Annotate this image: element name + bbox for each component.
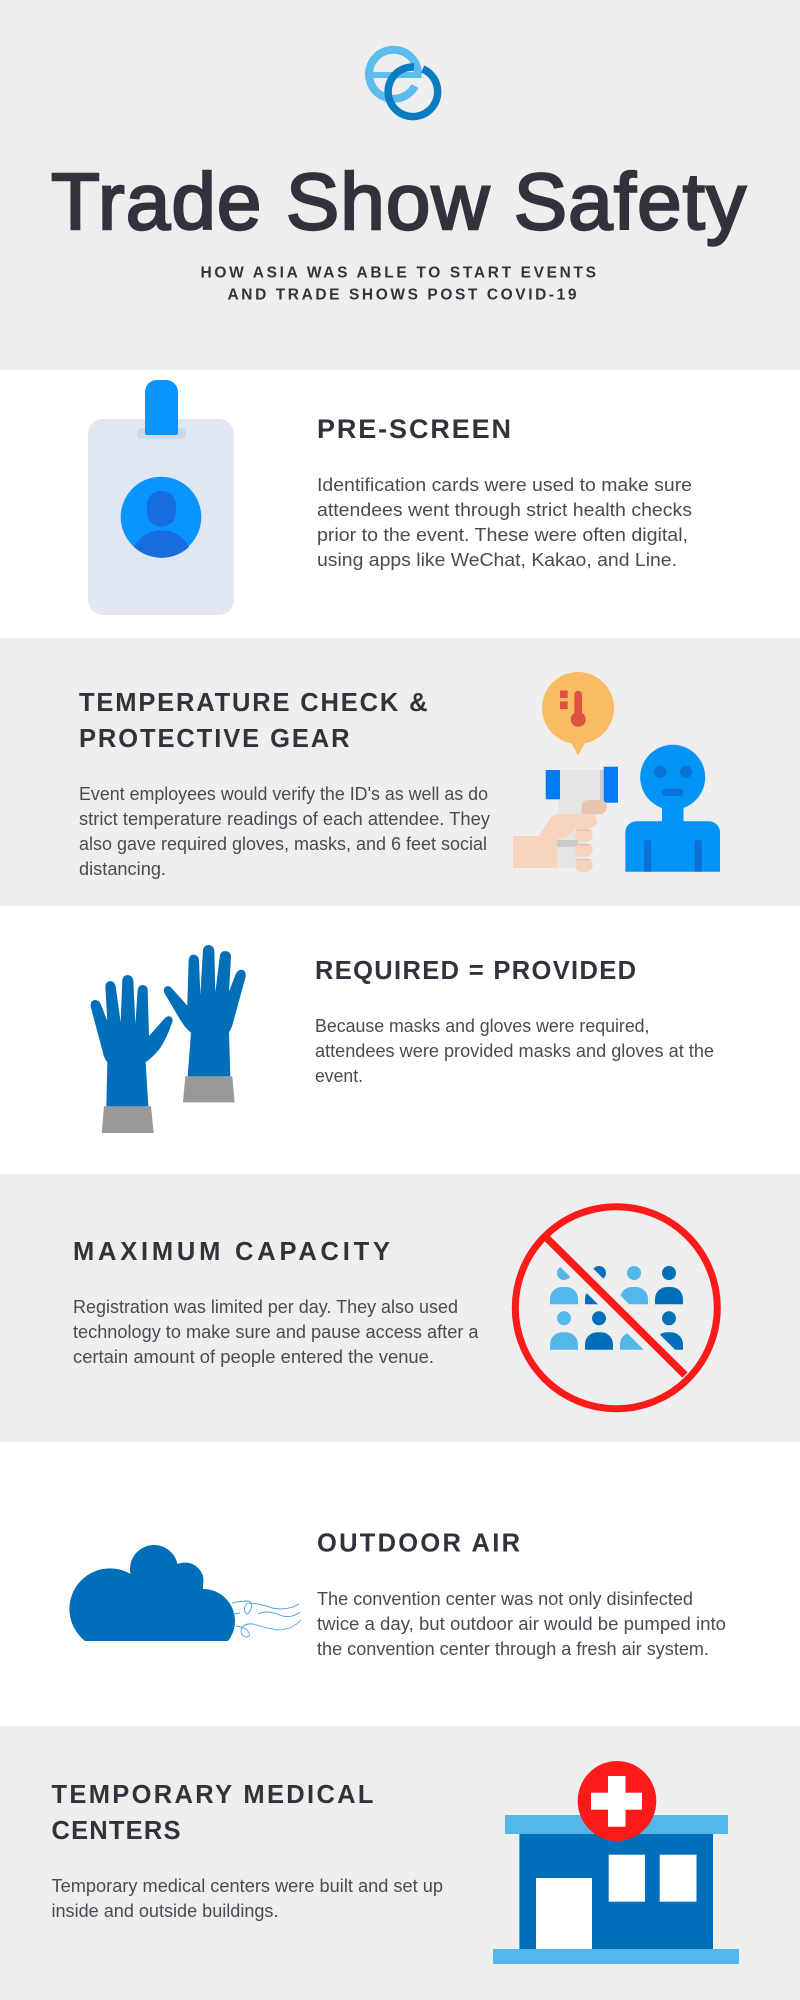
subtitle: AND TRADE SHOWS POST COVID-19 bbox=[228, 286, 577, 304]
heading: PRE-SCREEN bbox=[317, 414, 511, 444]
icon: cloud with wind bbox=[69, 1545, 302, 1641]
icon: upper glove bbox=[164, 945, 246, 1102]
heading bbox=[52, 1781, 374, 1845]
text block: twice a day, but outdoor air would be pumped into bbox=[317, 1614, 726, 1634]
panel: required equals provided bbox=[91, 945, 714, 1133]
icon: speech bubble thermometer bbox=[542, 672, 614, 756]
panel: temporary medical centers bbox=[52, 1761, 739, 1964]
text block: Registration was limited per day. They also used bbox=[73, 1297, 458, 1317]
text block: certain amount of people entered the venue. bbox=[73, 1347, 434, 1367]
subtitle: HOW ASIA WAS ABLE TO START EVENTS bbox=[200, 264, 596, 282]
text block: the convention center through a fresh air system. bbox=[317, 1639, 709, 1659]
text block: technology to make sure and pause access after a bbox=[73, 1322, 479, 1342]
panel: header bbox=[51, 50, 746, 303]
text block bbox=[79, 784, 490, 879]
panel: maximum capacity bbox=[73, 1207, 717, 1409]
text block: strict temperature readings of each attendee. They bbox=[79, 809, 490, 829]
text block: Event employees would verify the ID's as well as do bbox=[79, 784, 488, 804]
text block bbox=[73, 1297, 479, 1367]
icon: people grid bbox=[547, 1238, 685, 1375]
heading bbox=[79, 689, 428, 753]
heading: CENTERS bbox=[52, 1817, 180, 1845]
subtitle bbox=[200, 264, 596, 304]
text block: also gave required gloves, masks, and 6 feet social bbox=[79, 834, 487, 854]
icon: lower glove bbox=[91, 975, 173, 1133]
text block: attendees went through strict health checks bbox=[317, 500, 692, 520]
icon: gloves bbox=[91, 945, 246, 1133]
icon: thermometer gun and hand bbox=[513, 767, 618, 872]
text block bbox=[315, 1016, 714, 1086]
heading: TEMPERATURE CHECK & bbox=[79, 689, 428, 717]
icon: temperature check bbox=[513, 672, 720, 872]
text block bbox=[317, 1589, 726, 1659]
icon: prohibition sign bbox=[515, 1207, 717, 1409]
text block: Identification cards were used to make sure bbox=[317, 475, 692, 495]
heading: OUTDOOR AIR bbox=[317, 1530, 520, 1558]
heading: REQUIRED = PROVIDED bbox=[315, 957, 636, 985]
icon: attendee bbox=[625, 745, 720, 872]
icon: cloud bbox=[69, 1545, 235, 1641]
text block: attendees were provided masks and gloves at the bbox=[315, 1041, 714, 1061]
icon: red cross bbox=[578, 1761, 656, 1841]
title: Trade Show Safety bbox=[51, 157, 746, 246]
icon: ID badge bbox=[88, 380, 234, 615]
heading: MAXIMUM CAPACITY bbox=[73, 1238, 390, 1266]
text block: The convention center was not only disinfected bbox=[317, 1589, 693, 1609]
icon: hospital bbox=[493, 1761, 739, 1964]
icon: no crowds bbox=[515, 1207, 717, 1409]
text block: prior to the event. These were often digital, bbox=[317, 525, 688, 545]
text block: Because masks and gloves were required, bbox=[315, 1016, 650, 1036]
text block: distancing. bbox=[79, 859, 166, 879]
panel: temperature check bbox=[79, 672, 720, 879]
text block bbox=[317, 475, 692, 570]
text block: event. bbox=[315, 1066, 363, 1086]
text block bbox=[52, 1876, 443, 1921]
icon: wind lines bbox=[232, 1601, 301, 1637]
text block: using apps like WeChat, Kakao, and Line. bbox=[317, 550, 677, 570]
text block: Temporary medical centers were built and set up bbox=[52, 1876, 443, 1896]
heading: TEMPORARY MEDICAL bbox=[52, 1781, 374, 1809]
heading: PROTECTIVE GEAR bbox=[79, 725, 350, 753]
panel: pre-screen bbox=[88, 380, 692, 615]
icon: logo bbox=[369, 50, 438, 117]
text block: inside and outside buildings. bbox=[52, 1901, 278, 1921]
panel: outdoor air bbox=[69, 1530, 726, 1659]
